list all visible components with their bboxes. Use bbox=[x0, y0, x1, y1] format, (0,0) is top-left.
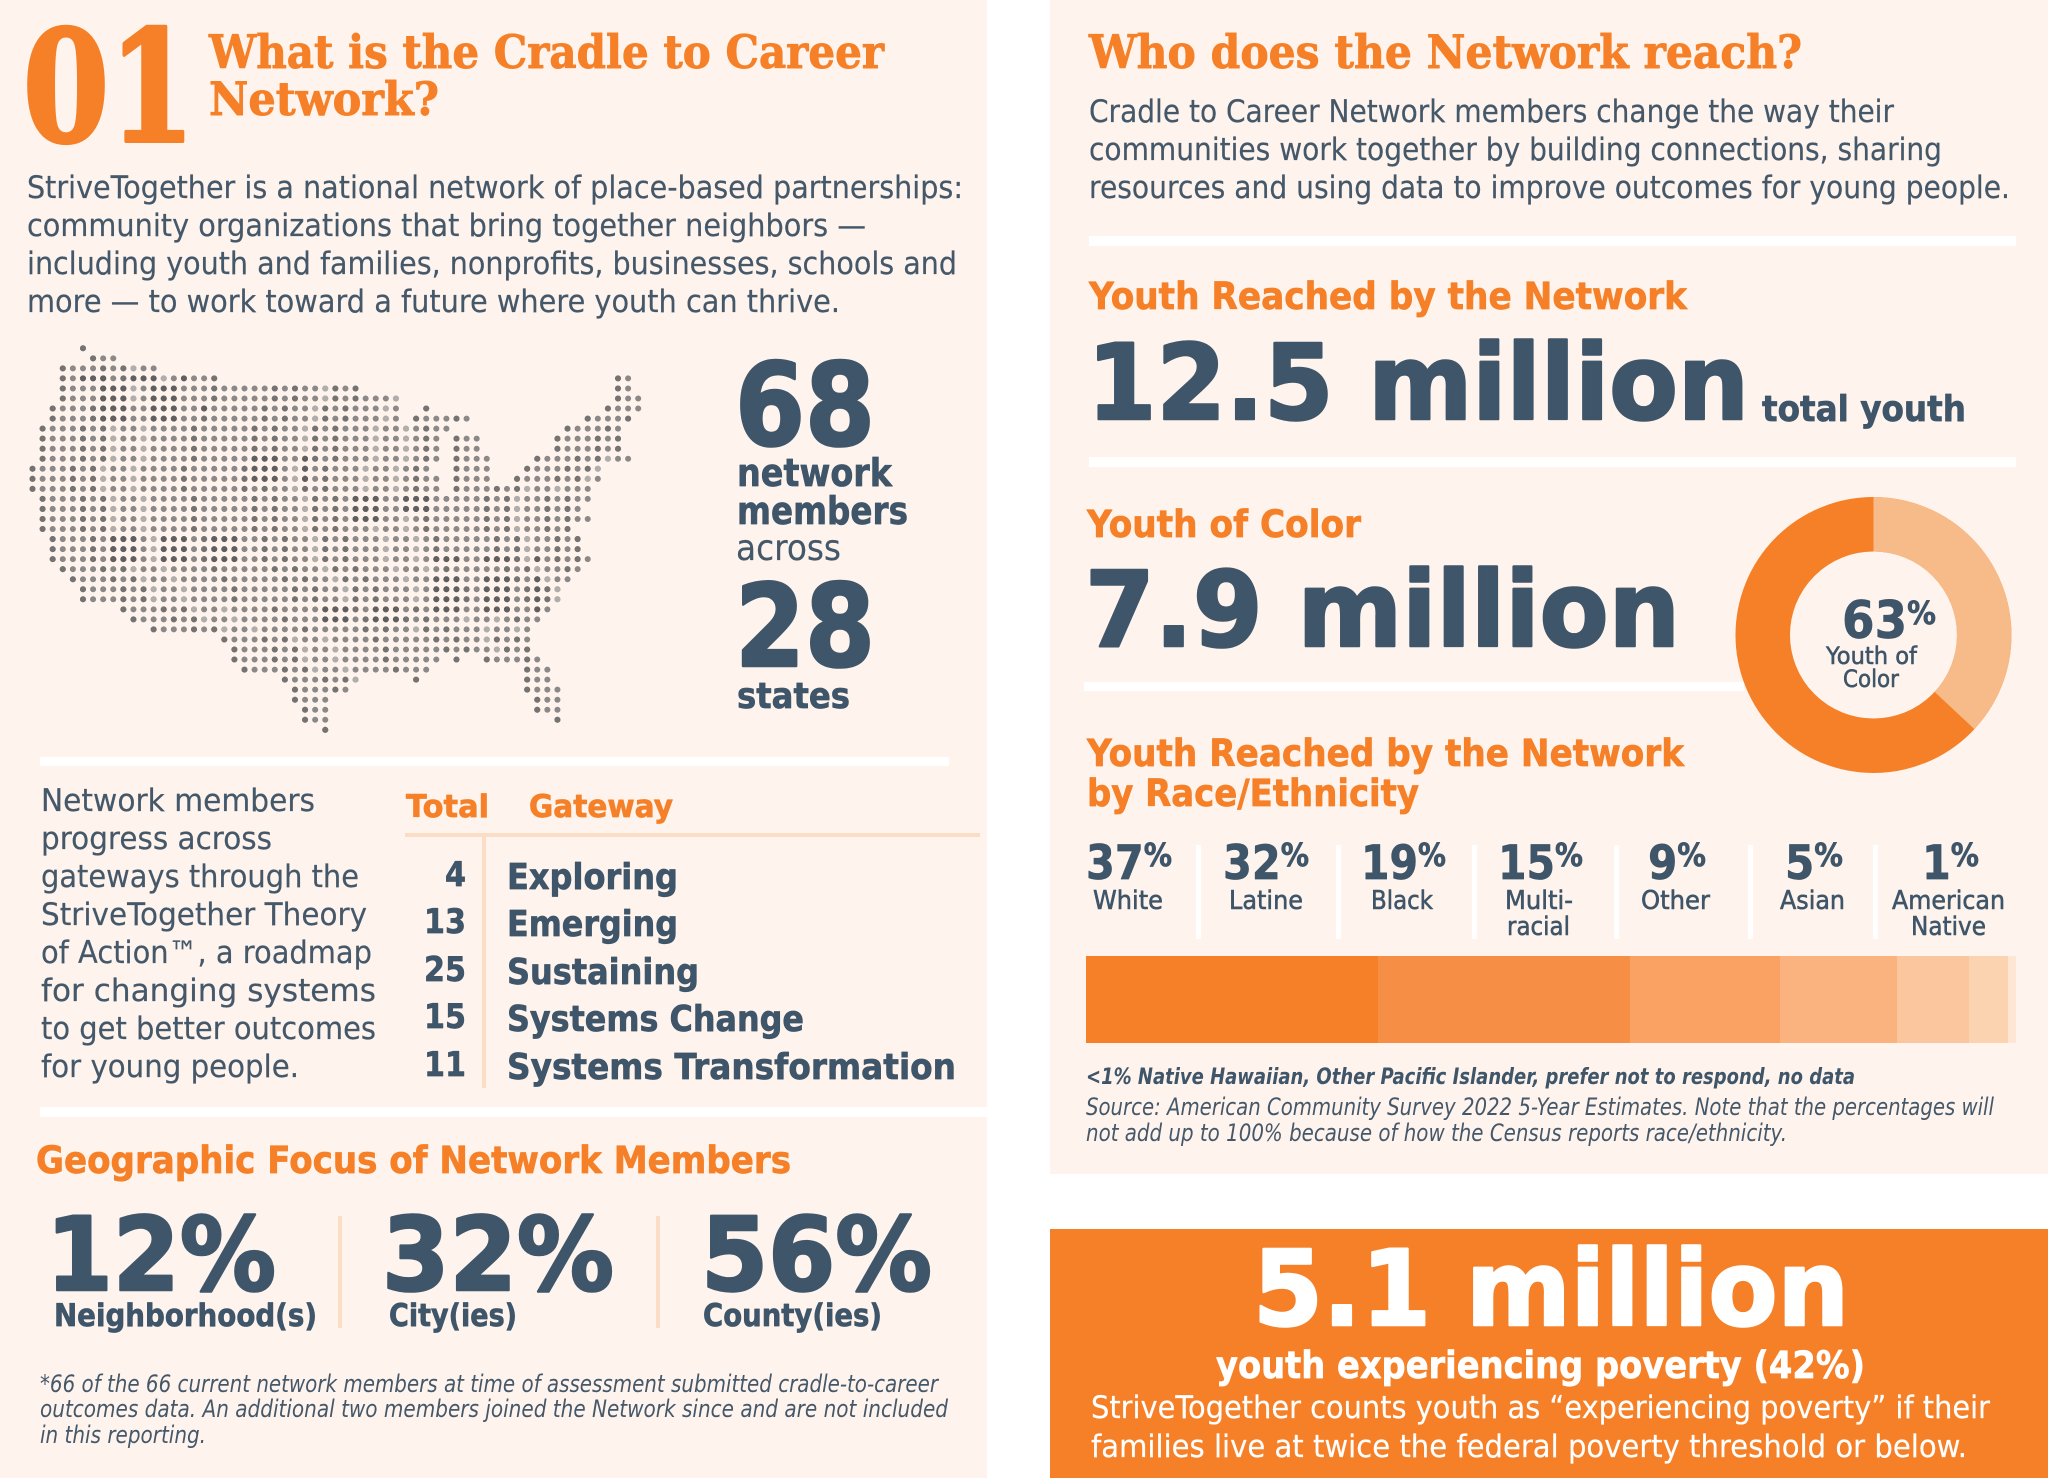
table: network members by gateway: 11 bbox=[424, 1045, 466, 1085]
dotted map of the United States bbox=[32, 348, 639, 730]
heading: race and ethnicity: by Race/Ethnicity bbox=[1087, 772, 1419, 815]
intro text block bbox=[27, 170, 963, 320]
stat: multiracial: Multi- bbox=[1505, 886, 1573, 916]
heading: race and ethnicity: Youth Reached by the Network bbox=[1086, 732, 1685, 775]
chart notes: <1% Native Hawaiian, Other Pacific Islander, prefer not to respond, no data bbox=[1086, 1065, 1855, 1090]
stat: network members and states: states bbox=[737, 676, 850, 717]
stat: multiracial: % bbox=[1555, 836, 1583, 874]
stat: black: 19 bbox=[1361, 836, 1426, 891]
table: network members by gateway: 13 bbox=[424, 902, 466, 942]
stat: cities: 32% bbox=[382, 1196, 614, 1315]
heading: geographic focus: Geographic Focus of Network Members bbox=[36, 1139, 791, 1182]
stat: other: 9 bbox=[1648, 836, 1681, 891]
stat: asian: Asian bbox=[1780, 886, 1845, 916]
gateways text block: of Action™, a roadmap bbox=[41, 935, 372, 971]
stat: youth of color: 7.9 million bbox=[1085, 549, 1680, 671]
intro text block: StriveTogether is a national network of place-based partnerships: bbox=[27, 170, 963, 206]
panel: youth experiencing poverty bbox=[1050, 1228, 2048, 1478]
gateways text block: for changing systems bbox=[41, 973, 376, 1009]
table: network members by gateway: 25 bbox=[424, 950, 466, 990]
table: network members by gateway: Emerging bbox=[507, 904, 678, 945]
stat: network members and states bbox=[735, 339, 908, 717]
table: network members by gateway: 15 bbox=[424, 997, 466, 1037]
gateways text block: StriveTogether Theory bbox=[41, 897, 367, 933]
stat: american native: % bbox=[1951, 836, 1979, 874]
section number 01: 01 bbox=[23, 0, 195, 178]
donut chart: 63 percent youth of color: 63 bbox=[1842, 591, 1914, 651]
stat: white: White bbox=[1093, 886, 1163, 916]
intro text block: more — to work toward a future where youth can thrive. bbox=[27, 284, 840, 320]
table: network members by gateway: 4 bbox=[445, 855, 466, 895]
stat: black: Black bbox=[1371, 886, 1433, 916]
gateways text block: to get better outcomes bbox=[41, 1011, 376, 1047]
table: network members by gateway: Systems Change bbox=[507, 999, 804, 1040]
chart notes bbox=[1086, 1065, 1994, 1147]
reach text block bbox=[1089, 94, 2010, 206]
stat: network members and states: 28 bbox=[735, 560, 875, 693]
intro text block: community organizations that bring together neighbors — bbox=[27, 208, 866, 244]
stat: total youth reached: Youth Reached by the Network bbox=[1088, 275, 1688, 318]
heading: what is the network: Network? bbox=[209, 72, 439, 126]
stat: multiracial: 15 bbox=[1498, 836, 1563, 891]
gateways text block bbox=[41, 783, 376, 1085]
footnote: *66 of the 66 current network members at time of assessment submitted cradle-to-career bbox=[40, 1370, 940, 1398]
stat: multiracial bbox=[1498, 836, 1583, 942]
donut chart: 63 percent youth of color: Youth of bbox=[1825, 642, 1918, 670]
stacked bar chart: race and ethnicity bbox=[1086, 956, 2016, 1043]
stat: counties: 56% bbox=[701, 1196, 932, 1315]
panel: youth experiencing poverty: 5.1 million bbox=[1253, 1228, 1849, 1350]
panel: youth experiencing poverty: StriveTogether counts youth as “experiencing poverty” if their bbox=[1091, 1390, 1990, 1426]
heading: race and ethnicity bbox=[1086, 732, 1685, 815]
stat: asian bbox=[1780, 836, 1845, 916]
panel: youth experiencing poverty: youth experiencing poverty (42%) bbox=[1216, 1344, 1865, 1387]
table: network members by gateway: Gateway bbox=[529, 789, 673, 825]
gateways text block: progress across bbox=[41, 821, 272, 857]
stat: total youth reached: 12.5 million bbox=[1087, 322, 1749, 444]
table: network members by gateway: Sustaining bbox=[507, 952, 699, 993]
table: network members by gateway: Total bbox=[406, 789, 489, 825]
panel: who does the network reach bbox=[1050, 0, 2048, 1174]
panel: what is the network bbox=[0, 0, 987, 1478]
footnote: in this reporting. bbox=[40, 1421, 206, 1449]
reach text block: Cradle to Career Network members change the way their bbox=[1089, 94, 1894, 130]
stat: white: 37 bbox=[1086, 836, 1151, 891]
stat: other bbox=[1641, 836, 1710, 916]
donut chart: 63 percent youth of color: % bbox=[1907, 594, 1936, 632]
donut chart: 63 percent youth of color bbox=[1763, 497, 2011, 746]
footnote: outcomes data. An additional two members joined the Network since and are not included bbox=[40, 1395, 949, 1423]
stat: multiracial: racial bbox=[1507, 912, 1570, 942]
stat: latine: % bbox=[1281, 836, 1309, 874]
gateways text block: Network members bbox=[41, 783, 315, 819]
panel: youth experiencing poverty: families live at twice the federal poverty threshold or below. bbox=[1091, 1429, 1967, 1465]
stat: network members and states: members bbox=[737, 489, 908, 533]
stat: other: % bbox=[1677, 836, 1706, 874]
stat: white bbox=[1086, 836, 1172, 916]
table: network members by gateway: Exploring bbox=[507, 857, 678, 898]
heading: what is the network bbox=[208, 25, 885, 126]
intro text block: including youth and families, nonprofits, businesses, schools and bbox=[27, 246, 957, 282]
stat: american native: American bbox=[1892, 886, 2005, 916]
table: network members by gateway: Systems Transformation bbox=[507, 1047, 956, 1088]
stat: network members and states: network bbox=[737, 451, 893, 495]
stat: black bbox=[1361, 836, 1446, 916]
stat: black: % bbox=[1418, 836, 1446, 874]
stat: neighborhoods: 12% bbox=[46, 1196, 276, 1315]
stat: neighborhoods: Neighborhood(s) bbox=[54, 1298, 317, 1334]
heading: who does the network reach: Who does the Network reach? bbox=[1088, 25, 1802, 79]
stat: youth of color: Youth of Color bbox=[1086, 503, 1362, 546]
stat: total youth reached: total youth bbox=[1762, 389, 1966, 430]
stat: american native: 1 bbox=[1922, 836, 1955, 891]
stat: network members and states: across bbox=[736, 528, 841, 569]
stat: american native: Native bbox=[1911, 912, 1986, 942]
footnote bbox=[40, 1370, 949, 1449]
donut chart: 63 percent youth of color: Color bbox=[1843, 665, 1899, 693]
heading: what is the network: What is the Cradle to Career bbox=[208, 25, 885, 79]
reach text block: communities work together by building connections, sharing bbox=[1089, 132, 1942, 168]
stat: latine: Latine bbox=[1229, 886, 1303, 916]
stat: network members and states: 68 bbox=[735, 339, 875, 472]
stat: latine: 32 bbox=[1223, 836, 1288, 891]
stat: asian: 5 bbox=[1785, 836, 1818, 891]
race and ethnicity percentages bbox=[1086, 836, 2005, 942]
gateways text block: gateways through the bbox=[41, 859, 359, 895]
table: network members by gateway bbox=[405, 789, 980, 1088]
stat: white: % bbox=[1144, 836, 1172, 874]
stat: latine bbox=[1223, 836, 1309, 916]
stat: cities: City(ies) bbox=[389, 1298, 517, 1334]
gateways text block: for young people. bbox=[41, 1049, 299, 1085]
stat: american native bbox=[1892, 836, 2005, 942]
stat: total youth reached bbox=[1087, 275, 1966, 444]
stat: counties: County(ies) bbox=[703, 1298, 882, 1334]
stat: other: Other bbox=[1641, 886, 1710, 916]
chart notes: not add up to 100% because of how the Census reports race/ethnicity. bbox=[1086, 1119, 1787, 1147]
stat: asian: % bbox=[1814, 836, 1843, 874]
